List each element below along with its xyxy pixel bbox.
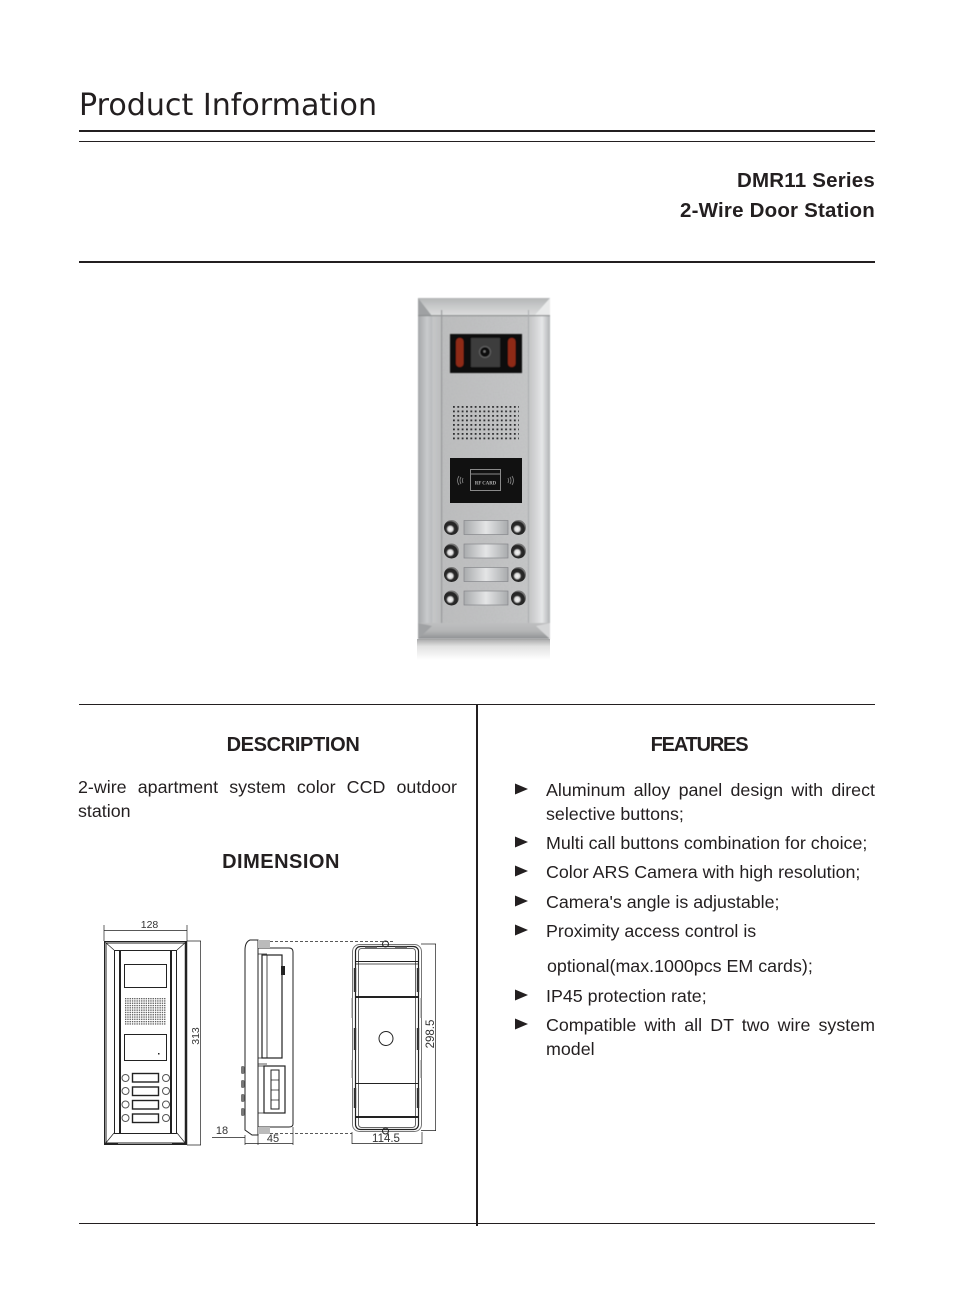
dimension drawing: rear view [352, 941, 436, 1144]
dimension labels: 18 [216, 1125, 228, 1137]
features list: Compatible with all DT two wire system [546, 1015, 875, 1035]
features list: selective buttons; [546, 804, 684, 824]
description text [78, 777, 457, 821]
features list: Color ARS Camera with high resolution; [546, 862, 860, 882]
series heading [680, 169, 875, 222]
RF card reader: RF CARD [475, 482, 497, 486]
description text: 2-wire apartment system color CCD outdoor [78, 777, 457, 797]
heading: description: DESCRIPTION [227, 734, 359, 756]
series heading: DMR11 Series [737, 169, 875, 192]
features list: IP45 protection rate; [546, 986, 707, 1006]
features list: model [546, 1039, 595, 1059]
features list: optional(max.1000pcs EM cards); [547, 956, 813, 976]
speaker grille [453, 406, 519, 442]
dimension labels [141, 919, 437, 1145]
RF card reader [450, 458, 522, 503]
camera window [450, 334, 522, 373]
reflection [417, 639, 550, 660]
dimension drawing: front view [104, 925, 201, 1145]
features list: Multi call buttons combination for choice; [546, 833, 867, 853]
description text: station [78, 801, 131, 821]
features list: Aluminum alloy panel design with direct [546, 780, 875, 800]
dimension labels: 128 [141, 919, 158, 931]
heading: dimension: DIMENSION [222, 851, 340, 873]
call buttons and name plates [444, 520, 526, 606]
dimension labels: 298.5 [425, 1020, 437, 1048]
dimension labels: 45 [267, 1133, 279, 1145]
title: Product Information [79, 88, 377, 123]
series heading: 2-Wire Door Station [680, 199, 875, 222]
features list: Proximity access control is [546, 921, 756, 941]
dimension labels: 114.5 [372, 1133, 400, 1145]
housing [418, 298, 550, 639]
features list: Camera's angle is adjustable; [546, 892, 780, 912]
features list [515, 780, 875, 1059]
heading: features: FEATURES [651, 734, 747, 756]
dimension drawing: side view [212, 940, 393, 1145]
dimension labels: 313 [190, 1027, 202, 1045]
